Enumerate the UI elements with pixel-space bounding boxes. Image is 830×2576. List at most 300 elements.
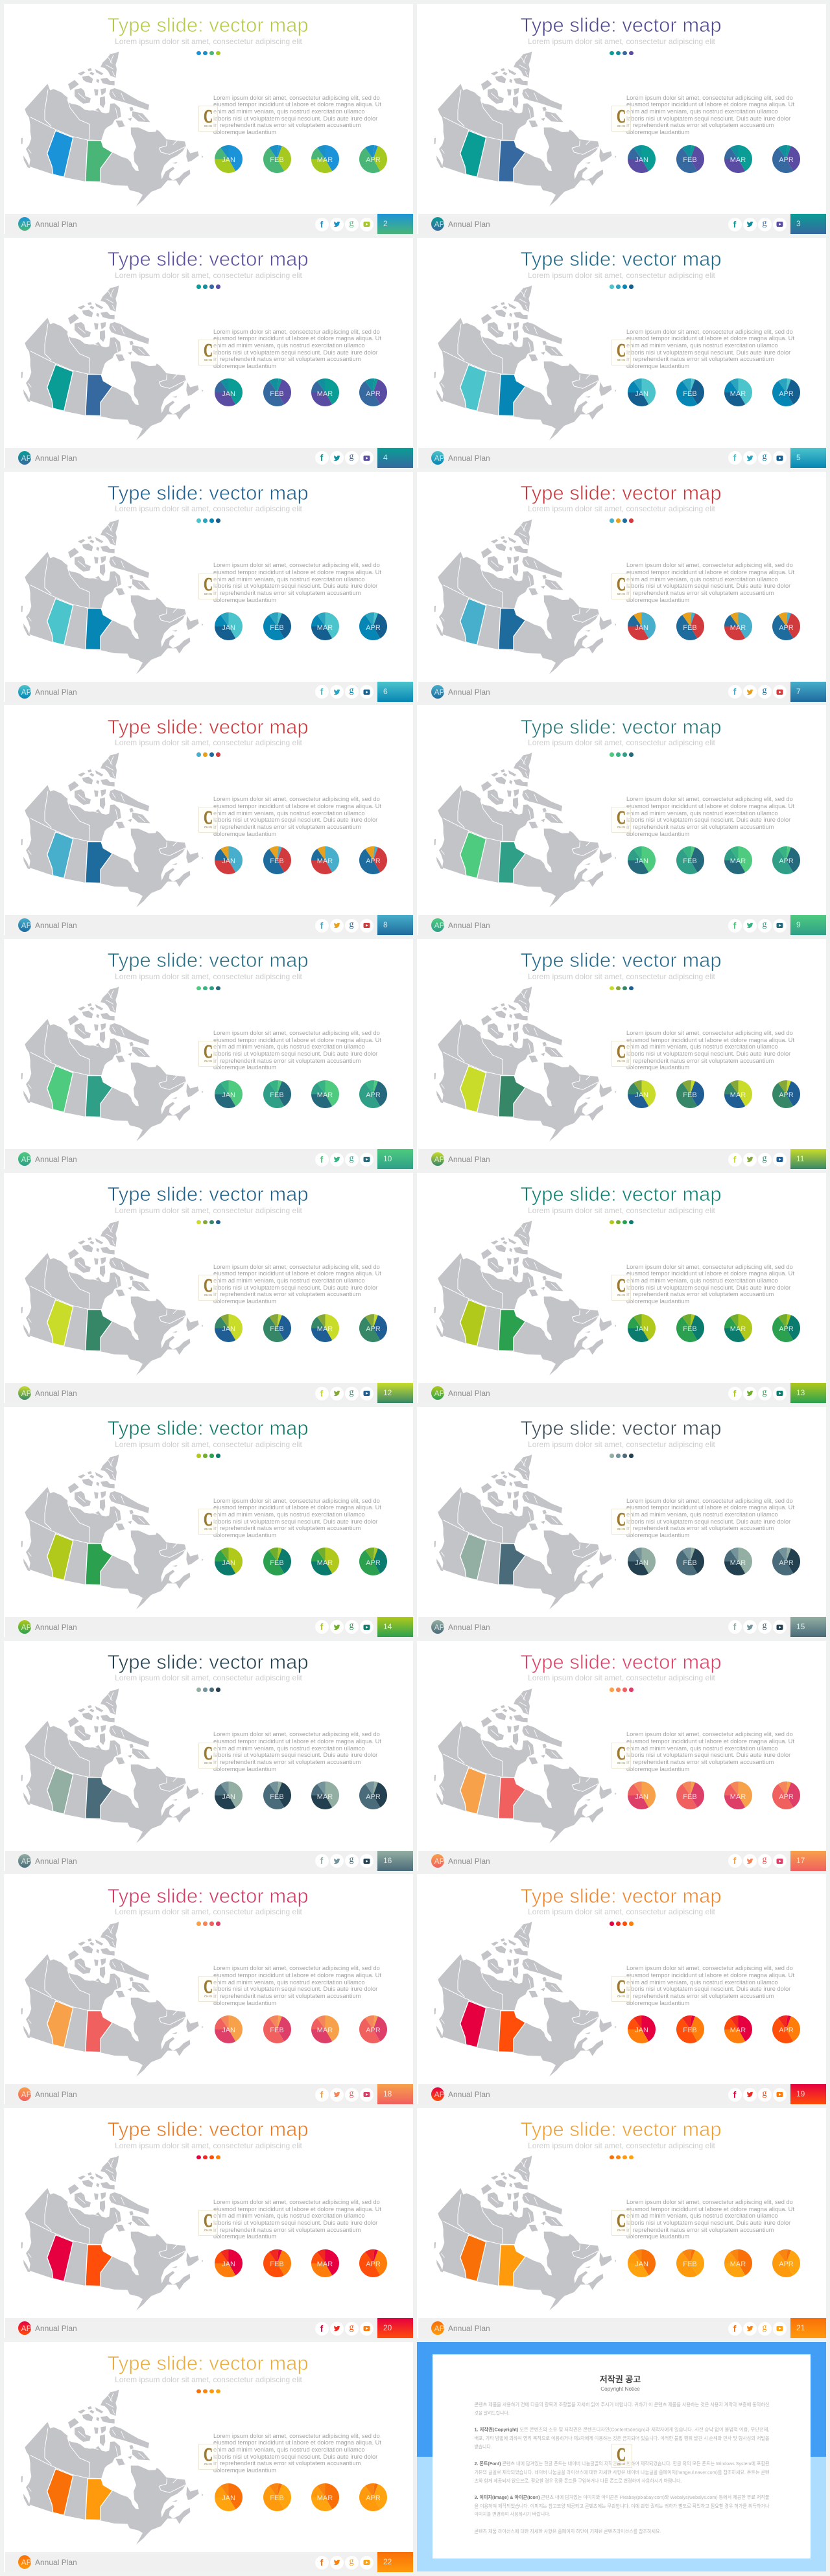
pie: FEB [263, 2015, 290, 2043]
page number [790, 2318, 826, 2338]
social icons: g [349, 1621, 354, 1630]
page number: 12 [383, 1388, 392, 1397]
panel: slide 4 [4, 238, 413, 468]
title: Type slide: vector map [108, 949, 309, 971]
watermark: C [617, 2211, 626, 2231]
dots [196, 2155, 221, 2160]
panel: slide 16 [4, 1641, 413, 1871]
logo [431, 685, 444, 699]
subtitle: Lorem ipsum dolor sit amet, consectetur adipiscing elit [528, 504, 715, 513]
dots [610, 518, 634, 523]
page number: 2 [383, 219, 388, 228]
watermark: C [617, 1042, 626, 1062]
panel: slide 12 [4, 1173, 413, 1403]
footer label: Annual Plan [448, 1389, 490, 1398]
pie: JAN [628, 846, 656, 874]
pie: JAN: JAN [222, 857, 235, 865]
pie: FEB [676, 612, 704, 640]
watermark: CH IS [204, 1761, 212, 1765]
pie: FEB [676, 2249, 704, 2277]
watermark: CH IS [204, 2229, 212, 2232]
page number: 18 [383, 2089, 392, 2098]
footer [418, 448, 826, 468]
page number [377, 448, 413, 468]
pie: APR [772, 145, 800, 173]
footer label: Annual Plan [35, 1389, 77, 1398]
footer [418, 1851, 826, 1871]
footer [418, 1617, 826, 1637]
pie: MAR: MAR [730, 2260, 746, 2268]
body text: Lorem ipsum dolor sit amet, consectetur adipiscing elit, sed do eiusmod tempor incididunt ut labore et dolore magna aliqua. Ut enim ad minim veniam, quis nostrud exercitation ullamco laboris nisi ut voluptatem sequi nesciunt. Duis aute irure dolor in reprehenderit natus error sit voluptatem accusantium doloremque laudantium [626, 95, 794, 135]
watermark: C [204, 1042, 213, 1062]
social icons: g [763, 1154, 766, 1163]
watermark: C [617, 575, 626, 595]
footer [418, 2318, 826, 2338]
watermark: C [617, 2445, 626, 2465]
logo [431, 217, 444, 231]
pie: MAR [724, 378, 752, 406]
subtitle: Lorem ipsum dolor sit amet, consectetur adipiscing elit [115, 2141, 302, 2150]
social icons: g [349, 1855, 354, 1864]
pie: APR [359, 1080, 387, 1108]
pie: JAN: JAN [635, 1091, 648, 1099]
logo [431, 1386, 444, 1400]
watermark: CH IS [204, 592, 212, 596]
watermark [198, 574, 218, 599]
pie: MAR: MAR [730, 390, 746, 398]
pie: JAN: JAN [635, 1793, 648, 1801]
panel: copyright notice [417, 2342, 826, 2571]
watermark: CH IS [617, 1527, 625, 1531]
pie: MAR [311, 612, 339, 640]
pie: APR [359, 846, 387, 874]
pie: APR: APR [366, 2494, 381, 2502]
footer [418, 214, 826, 234]
footer label: Annual Plan [35, 688, 77, 697]
social icons [315, 1854, 374, 1868]
pie: FEB: FEB [683, 1793, 697, 1801]
pie: MAR: MAR [730, 857, 746, 865]
notice text: 3. 이미지(Image) & 아이콘(Icon) 콘텐츠 내에 담겨있는 이미지와 아이콘은 Pixabay(pixabay.com)와 Webalys(webalys.com) 등에서 제공한 무료 저작물 [474, 2494, 769, 2500]
title: Type slide: vector map [521, 248, 722, 270]
social icons: g [763, 1855, 766, 1864]
logo [431, 2087, 444, 2101]
pie: JAN: JAN [222, 156, 235, 164]
social icons: g [349, 2556, 354, 2566]
pie: MAR: MAR [730, 156, 746, 164]
pie: APR: APR [366, 156, 381, 164]
pie: FEB [263, 2483, 290, 2511]
pie: JAN: JAN [222, 624, 235, 632]
pie: FEB: FEB [270, 390, 284, 398]
footer label: Annual Plan [35, 454, 77, 463]
footer label: Annual Plan [448, 220, 490, 229]
map: Canada [413, 1442, 621, 1623]
title: Type slide: vector map [521, 715, 722, 738]
dots [196, 284, 220, 289]
dots [196, 1220, 221, 1225]
title: Type slide: vector map [108, 1417, 309, 1439]
pie: FEB: FEB [683, 1559, 697, 1567]
watermark: CH IS [617, 1995, 625, 1998]
pie: FEB: FEB [683, 624, 697, 632]
pie: APR [772, 1080, 800, 1108]
watermark [198, 1976, 218, 2002]
notice sheet [432, 2354, 811, 2559]
footer label: Annual Plan [35, 2090, 77, 2099]
footer label: Annual Plan [448, 921, 490, 930]
dots [196, 1921, 221, 1926]
pie: FEB [263, 378, 291, 406]
pie: FEB [676, 1080, 704, 1108]
map: Canada [434, 520, 616, 674]
logo [431, 1620, 444, 1634]
subtitle: Lorem ipsum dolor sit amet, consectetur adipiscing elit [115, 972, 302, 981]
watermark: C [204, 1744, 213, 1764]
pie: MAR: MAR [317, 390, 333, 398]
page number [377, 1851, 413, 1871]
social icons: f [733, 1621, 736, 1632]
pie: JAN [628, 1080, 656, 1108]
watermark [611, 1976, 631, 2002]
map: Canada [0, 2377, 208, 2559]
page number [790, 1617, 826, 1637]
pie: JAN: JAN [222, 1559, 235, 1567]
title: Type slide: vector map [521, 949, 722, 971]
logo [431, 918, 444, 932]
dots [610, 1921, 634, 1926]
dots [610, 752, 634, 757]
pie: FEB [263, 846, 290, 874]
pie: JAN [628, 1314, 656, 1341]
pie: FEB: FEB [270, 2494, 284, 2502]
notice text: 저작권 공고 [599, 2374, 641, 2384]
social icons [315, 451, 374, 465]
social icons: f [320, 452, 323, 463]
pie: APR: APR [779, 857, 794, 865]
social icons: f [320, 1154, 323, 1165]
pie: FEB [676, 1314, 704, 1341]
pie: FEB [263, 1781, 290, 1809]
panel: slide 6 [4, 472, 413, 702]
watermark [198, 2210, 218, 2236]
watermark: C [617, 1744, 626, 1764]
map: Canada [21, 52, 204, 206]
map: Canada [413, 1909, 621, 2091]
watermark [611, 807, 631, 833]
footer [418, 1383, 826, 1403]
page number: 5 [796, 453, 801, 462]
watermark: C [204, 1510, 213, 1530]
footer label: Annual Plan [35, 2558, 77, 2567]
body text: Lorem ipsum dolor sit amet, consectetur adipiscing elit, sed do eiusmod tempor incididunt ut labore et dolore magna aliqua. Ut enim ad minim veniam, quis nostrud exercitation ullamco laboris nisi ut voluptatem sequi nesciunt. Duis aute irure dolor in reprehenderit natus error sit voluptatem accusantium doloremque laudantium [626, 796, 794, 837]
page number [790, 682, 826, 702]
panel: slide 21 [417, 2108, 826, 2338]
pie: JAN [215, 846, 243, 874]
subtitle: Lorem ipsum dolor sit amet, consectetur adipiscing elit [528, 1673, 715, 1682]
page number: 15 [796, 1622, 805, 1631]
pie: MAR: MAR [317, 857, 333, 865]
page number: 22 [383, 2557, 392, 2566]
title: Type slide: vector map [108, 1885, 309, 1907]
pie: JAN [215, 1080, 243, 1108]
footer label: Annual Plan [448, 2090, 490, 2099]
title: Type slide: vector map [108, 248, 309, 270]
watermark: C [617, 808, 626, 828]
pie: JAN: JAN [222, 2260, 235, 2268]
page number: 8 [383, 920, 388, 929]
panel: slide 5 [417, 238, 826, 468]
logo [18, 451, 31, 465]
pie: APR: APR [779, 1325, 794, 1333]
body text: Lorem ipsum dolor sit amet, consectetur adipiscing elit, sed do eiusmod tempor incididunt ut labore et dolore magna aliqua. Ut enim ad minim veniam, quis nostrud exercitation ullamco laboris nisi ut voluptatem sequi nesciunt. Duis aute irure dolor in reprehenderit natus error sit voluptatem accusantium doloremque laudantium [626, 562, 794, 603]
dots [610, 986, 634, 991]
footer [5, 1383, 413, 1403]
pie: FEB [676, 1781, 704, 1809]
watermark [611, 1743, 631, 1769]
social icons: g [763, 1387, 766, 1397]
notice text: 배포, 기타 방법에 의하여 영리 목적으로 이용하거나 제3자에게 이용하는 것은 금지되어 있습니다. 이러한 불법 행위 발견 시 손해와 민사 및 형사상의 처벌을 [474, 2435, 769, 2441]
pie: JAN: JAN [635, 857, 648, 865]
pie: JAN [628, 1548, 656, 1575]
logo [18, 2321, 31, 2335]
dots [610, 1220, 634, 1225]
panel: slide 22 [4, 2342, 413, 2572]
body text: Lorem ipsum dolor sit amet, consectetur adipiscing elit, sed do eiusmod tempor incididunt ut labore et dolore magna aliqua. Ut enim ad minim veniam, quis nostrud exercitation ullamco laboris nisi ut voluptatem sequi nesciunt. Duis aute irure dolor in reprehenderit natus error sit voluptatem accusantium doloremque laudantium [213, 1498, 381, 1538]
title: Type slide: vector map [521, 1651, 722, 1673]
social icons [728, 1387, 786, 1400]
map: Canada [413, 974, 621, 1155]
subtitle: Lorem ipsum dolor sit amet, consectetur adipiscing elit [115, 1907, 302, 1916]
footer label: Annual Plan [35, 1623, 77, 1632]
pie: APR [772, 1548, 800, 1575]
social icons: f [320, 219, 323, 229]
page number [377, 2318, 413, 2338]
pie: APR: APR [366, 624, 381, 632]
watermark: CH IS [617, 1294, 625, 1297]
page number [377, 682, 413, 702]
pie: JAN: JAN [222, 390, 235, 398]
pie: FEB [676, 145, 704, 173]
footer label: Annual Plan [448, 1857, 490, 1866]
title: Type slide: vector map [108, 715, 309, 738]
pie: APR [359, 145, 387, 173]
title: Type slide: vector map [521, 2118, 722, 2141]
page number: 17 [796, 1856, 805, 1865]
watermark: CH IS [204, 124, 212, 128]
social icons: f [320, 920, 323, 931]
map: Canada [21, 520, 204, 674]
social icons [728, 2322, 786, 2336]
pie: MAR [724, 1781, 752, 1809]
notice text: 기본의 글꼴로 제작되었습니다. 네이버 나눔글꼴 라이선스에 대한 자세한 사항은 네이버 나눔글꼴 홈페이지(hangeul.naver.com)를 참조하세요. 폰트는 콘텐 [474, 2469, 769, 2475]
social icons: g [763, 2323, 766, 2332]
dots [196, 1454, 221, 1458]
pie: JAN [628, 378, 656, 406]
social icons [315, 685, 374, 699]
logo [18, 685, 31, 699]
social icons: f [733, 920, 736, 931]
pie: APR: APR [366, 1325, 381, 1333]
pie: MAR: MAR [317, 1793, 333, 1801]
pie: MAR [724, 612, 752, 640]
pie: JAN [628, 2015, 656, 2043]
pie: MAR: MAR [317, 2494, 333, 2502]
social icons: f [320, 2323, 323, 2334]
social icons [728, 2088, 786, 2102]
footer [5, 1149, 413, 1169]
social icons: f [733, 686, 736, 697]
social icons [315, 1153, 374, 1166]
social icons [315, 2556, 374, 2569]
watermark: CH IS [204, 2463, 212, 2466]
subtitle: Lorem ipsum dolor sit amet, consectetur adipiscing elit [115, 1206, 302, 1215]
watermark [198, 1743, 218, 1769]
pie: JAN: JAN [222, 2026, 235, 2034]
body text: Lorem ipsum dolor sit amet, consectetur adipiscing elit, sed do eiusmod tempor incididunt ut labore et dolore magna aliqua. Ut enim ad minim veniam, quis nostrud exercitation ullamco laboris nisi ut voluptatem sequi nesciunt. Duis aute irure dolor in reprehenderit natus error sit voluptatem accusantium doloremque laudantium [213, 1264, 381, 1305]
page number: 4 [383, 453, 388, 462]
watermark: CH IS [204, 1060, 212, 1063]
footer [418, 915, 826, 935]
pie: JAN: JAN [635, 1325, 648, 1333]
watermark [611, 1275, 631, 1301]
subtitle: Lorem ipsum dolor sit amet, consectetur adipiscing elit [115, 2375, 302, 2384]
watermark: CH IS [617, 592, 625, 596]
pie: APR [772, 2015, 800, 2043]
logo [18, 1620, 31, 1634]
pie: FEB: FEB [270, 1325, 284, 1333]
page number [790, 448, 826, 468]
pie: JAN [215, 612, 243, 640]
pie: JAN: JAN [635, 624, 648, 632]
social icons: g [763, 2089, 766, 2098]
logo [18, 2555, 31, 2569]
dots [196, 2389, 221, 2394]
pie: APR [359, 1781, 387, 1809]
pie: APR: APR [779, 390, 794, 398]
title: Type slide: vector map [108, 482, 309, 504]
footer label: Annual Plan [35, 1155, 77, 1164]
dots [196, 986, 221, 991]
watermark: CH IS [617, 2229, 625, 2232]
map: Canada [413, 1208, 621, 1389]
watermark [198, 2444, 218, 2470]
pie: MAR [724, 145, 752, 173]
footer label: Annual Plan [448, 1155, 490, 1164]
watermark: C [204, 107, 213, 127]
dots [610, 2155, 634, 2160]
pie: MAR [311, 2483, 338, 2511]
body text: Lorem ipsum dolor sit amet, consectetur adipiscing elit, sed do eiusmod tempor incididunt ut labore et dolore magna aliqua. Ut enim ad minim veniam, quis nostrud exercitation ullamco laboris nisi ut voluptatem sequi nesciunt. Duis aute irure dolor in reprehenderit natus error sit voluptatem accusantium doloremque laudantium [213, 796, 381, 837]
page number [790, 1149, 826, 1169]
notice text: 을 이용하여 제작되었습니다. 이미지는 참고모양 제공되고 콘텐츠에는 무관합니다. 이에 관한 권리는 귀하가 별도로 확인하고 필요할 경우 허가를 취득하거나 [474, 2503, 769, 2509]
body text: Lorem ipsum dolor sit amet, consectetur adipiscing elit, sed do eiusmod tempor incididunt ut labore et dolore magna aliqua. Ut enim ad minim veniam, quis nostrud exercitation ullamco laboris nisi ut voluptatem sequi nesciunt. Duis aute irure dolor in reprehenderit natus error sit voluptatem accusantium doloremque laudantium [213, 2433, 381, 2474]
watermark [198, 1275, 218, 1301]
social icons [728, 451, 787, 465]
watermark: C [617, 107, 626, 127]
watermark [611, 340, 631, 366]
logo [18, 1386, 31, 1400]
logo [18, 217, 31, 231]
pie: JAN [215, 1781, 243, 1809]
pie: JAN: JAN [635, 390, 648, 398]
subtitle: Lorem ipsum dolor sit amet, consectetur adipiscing elit [115, 37, 302, 46]
pie: FEB: FEB [683, 1325, 697, 1333]
page number: 13 [796, 1388, 805, 1397]
watermark: C [204, 341, 213, 361]
map: Canada [21, 285, 204, 441]
page number [377, 2552, 413, 2572]
watermark: C [204, 2445, 213, 2465]
footer [5, 2318, 413, 2338]
social icons: g [349, 1387, 354, 1397]
subtitle: Lorem ipsum dolor sit amet, consectetur adipiscing elit [528, 972, 715, 981]
subtitle: Lorem ipsum dolor sit amet, consectetur adipiscing elit [528, 2141, 715, 2150]
social icons: f [320, 2089, 323, 2100]
body text: Lorem ipsum dolor sit amet, consectetur adipiscing elit, sed do eiusmod tempor incididunt ut labore et dolore magna aliqua. Ut enim ad minim veniam, quis nostrud exercitation ullamco laboris nisi ut voluptatem sequi nesciunt. Duis aute irure dolor in reprehenderit natus error sit voluptatem accusantium doloremque laudantium [626, 1965, 794, 2006]
page number: 11 [796, 1154, 804, 1163]
body text: Lorem ipsum dolor sit amet, consectetur adipiscing elit, sed do eiusmod tempor incididunt ut labore et dolore magna aliqua. Ut enim ad minim veniam, quis nostrud exercitation ullamco laboris nisi ut voluptatem sequi nesciunt. Duis aute irure dolor in reprehenderit natus error sit voluptatem accusantium doloremque laudantium [213, 1965, 381, 2006]
panel: slide 18 [4, 1874, 413, 2104]
social icons: g [763, 920, 766, 929]
footer label: Annual Plan [448, 688, 490, 697]
pie: JAN [628, 2249, 656, 2277]
footer label: Annual Plan [35, 1857, 77, 1866]
pie: FEB: FEB [270, 156, 284, 164]
panel: slide 3 [417, 4, 826, 234]
pie: MAR [724, 2249, 752, 2277]
pie: JAN: JAN [635, 2260, 648, 2268]
footer [418, 1149, 826, 1169]
body text: Lorem ipsum dolor sit amet, consectetur adipiscing elit, sed do eiusmod tempor incididunt ut labore et dolore magna aliqua. Ut enim ad minim veniam, quis nostrud exercitation ullamco laboris nisi ut voluptatem sequi nesciunt. Duis aute irure dolor in reprehenderit natus error sit voluptatem accusantium doloremque laudantium [213, 95, 381, 135]
pie: JAN [628, 612, 656, 640]
dots [196, 518, 220, 523]
watermark: C [617, 341, 626, 361]
page number [790, 214, 826, 234]
pie: APR: APR [366, 2026, 381, 2034]
footer label: Annual Plan [35, 220, 77, 229]
pie: APR [359, 2483, 387, 2511]
dots [610, 284, 634, 289]
pie: APR [359, 378, 387, 406]
pie: FEB [263, 1314, 290, 1341]
pie: JAN [215, 2249, 243, 2277]
social icons [315, 1387, 374, 1400]
pie: FEB [676, 1548, 704, 1575]
title: Type slide: vector map [108, 2118, 309, 2141]
watermark: C [204, 1276, 213, 1296]
watermark: CH IS [204, 826, 212, 829]
page number [377, 915, 413, 935]
pie: MAR [311, 846, 338, 874]
pie: FEB [676, 378, 704, 406]
pie: APR [772, 612, 800, 640]
social icons [315, 218, 374, 231]
map: Canada [413, 1676, 621, 1857]
pie: FEB: FEB [683, 2026, 697, 2034]
pie: FEB: FEB [683, 156, 697, 164]
social icons [315, 919, 374, 933]
pie: FEB [676, 2015, 704, 2043]
pie: MAR: MAR [317, 1325, 333, 1333]
subtitle: Lorem ipsum dolor sit amet, consectetur adipiscing elit [528, 1907, 715, 1916]
subtitle: Lorem ipsum dolor sit amet, consectetur adipiscing elit [115, 1673, 302, 1682]
page number [377, 1149, 413, 1169]
pie: JAN: JAN [222, 1793, 235, 1801]
watermark: CH IS [204, 1294, 212, 1297]
dots [610, 1688, 634, 1692]
footer [5, 682, 413, 702]
